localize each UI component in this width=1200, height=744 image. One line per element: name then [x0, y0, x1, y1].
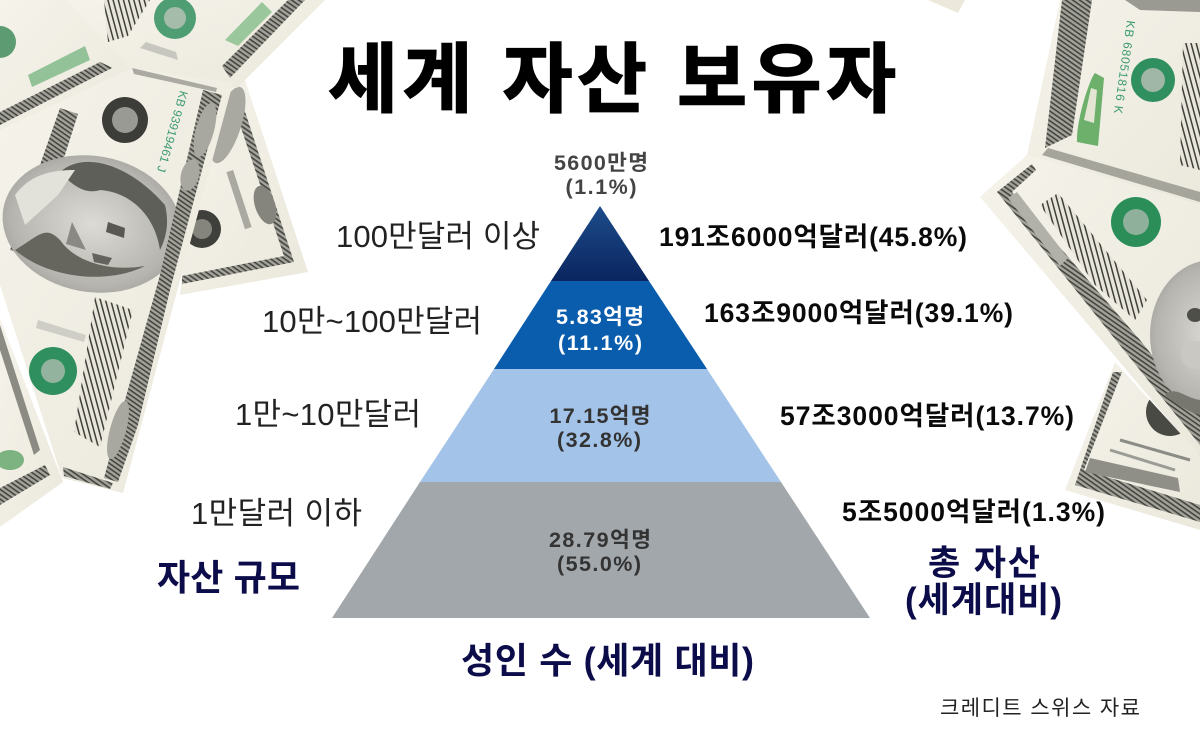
third tier adults label: [550, 404, 650, 452]
third tier adults label: 17.15억명: [550, 404, 650, 428]
second tier adults label: [556, 305, 644, 355]
second tier adults label: 5.83억명: [556, 305, 644, 329]
tier: 100K to 1M dollars: [494, 281, 707, 369]
heading: total assets: [905, 544, 1062, 620]
asset size labels: [191, 219, 540, 531]
third tier adults label: (32.8%): [557, 428, 641, 452]
total assets labels: 163조9000억달러(39.1%): [704, 298, 1013, 328]
top tier adults label: [554, 151, 648, 199]
illustration: dollar bills, left: [0, 0, 325, 527]
source note: 크레디트 스위스 자료: [940, 697, 1140, 720]
title: 세계 자산 보유자: [328, 38, 896, 123]
heading: asset size: 자산 규모: [157, 557, 300, 598]
top tier adults label: 5600만명: [554, 151, 648, 175]
asset size labels: 10만~100만달러: [262, 304, 482, 339]
bottom tier adults label: (55.0%): [557, 552, 641, 576]
total assets labels: 191조6000억달러(45.8%): [659, 222, 967, 252]
bottom tier adults label: 28.79억명: [549, 528, 651, 552]
portrait of Franklin: [1150, 260, 1200, 415]
heading: total assets: 총 자산: [928, 544, 1040, 583]
asset size labels: 1만~10만달러: [235, 397, 421, 432]
illustration: dollar bills, left: KB 93919461 J: [154, 89, 191, 174]
illustration: dollar bills, right: [928, 0, 1200, 530]
tier: over 1M dollars: [551, 206, 649, 281]
total assets labels: 5조5000억달러(1.3%): [842, 497, 1105, 527]
second tier adults label: (11.1%): [558, 331, 642, 355]
total assets labels: 57조3000억달러(13.7%): [780, 401, 1074, 431]
pyramid chart: [332, 206, 870, 618]
asset size labels: 1만달러 이하: [191, 496, 362, 531]
portrait of Franklin: [2, 155, 176, 293]
illustration: dollar bills, right: KB 68051816 K: [1111, 20, 1138, 115]
bottom tier adults label: [549, 528, 651, 576]
tier: 10K to 100K dollars: [420, 369, 781, 482]
heading: total assets: (세계대비): [905, 581, 1062, 620]
tier: under 10K dollars: [332, 482, 870, 618]
heading: adults: 성인 수 (세계 대비): [461, 640, 754, 681]
total assets labels: [659, 222, 1105, 527]
top tier adults label: (1.1%): [566, 175, 636, 199]
asset size labels: 100만달러 이상: [336, 219, 540, 254]
